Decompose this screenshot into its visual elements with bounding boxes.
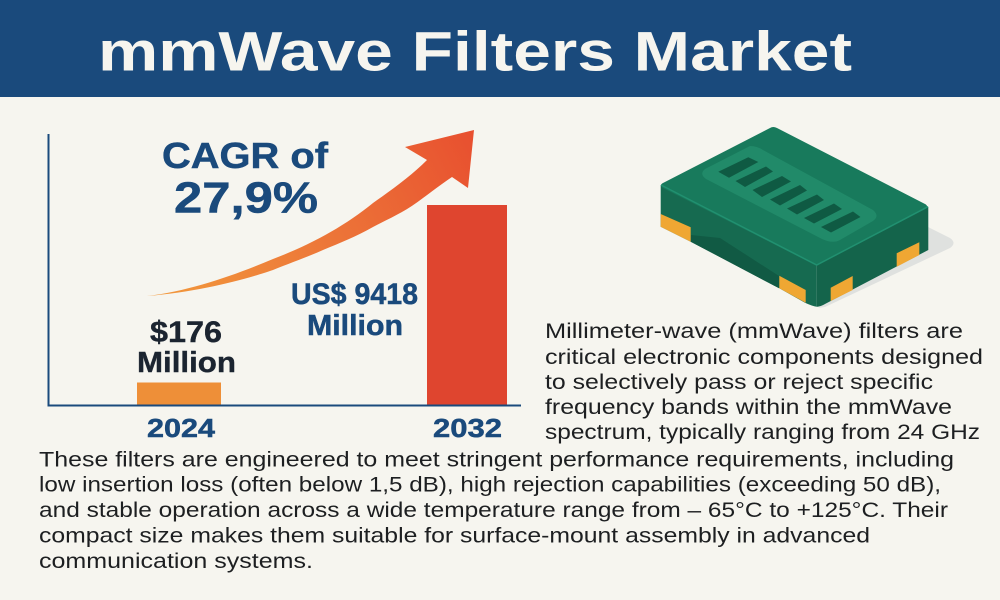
chart axes — [48, 134, 521, 406]
axis label: 2024: 2024 — [147, 413, 216, 443]
text block: definition: Millimeter-wave (mmWave) filters are — [545, 319, 963, 343]
value label: 2024: $176 — [150, 316, 222, 349]
bar: 2032 — [427, 205, 507, 404]
header banner — [0, 0, 1000, 97]
value label: 2032: US$ 9418 — [291, 278, 418, 311]
chip left side undercut — [691, 235, 779, 288]
CAGR label — [162, 135, 329, 222]
title: mmWave Filters Market — [98, 20, 852, 82]
CAGR label: 27,9% — [174, 174, 318, 222]
solder pads — [661, 214, 919, 303]
value label: 2024: Million — [137, 347, 236, 379]
text block: performance and applications — [39, 448, 954, 573]
chip right side — [817, 207, 928, 307]
text block: performance and applications: low insertion loss (often below 1,5 dB), high rejection capabilities (exceeding 50 dB), — [39, 472, 941, 496]
text block: definition: frequency bands within the mmWave — [545, 395, 952, 419]
value label: 2032 — [291, 278, 418, 342]
text block: performance and applications: compact size makes them suitable for surface-mount assembly in advanced — [39, 524, 870, 548]
growth arrow — [147, 130, 474, 296]
bar: 2024 — [137, 382, 221, 404]
CAGR label: CAGR of — [162, 135, 329, 176]
recessed label panel — [702, 146, 876, 242]
axis label: 2032: 2032 — [433, 413, 502, 443]
text block: performance and applications: These filters are engineered to meet stringent performance requirements, including — [39, 448, 954, 472]
value label: 2024 — [137, 316, 236, 379]
text block: definition: spectrum, typically ranging from 24 GHz — [545, 420, 980, 444]
chip left side — [661, 185, 817, 307]
text block: definition: critical electronic components designed — [545, 345, 983, 369]
text block: performance and applications: communication systems. — [39, 549, 313, 573]
icon: mmWave filter chip — [661, 127, 954, 308]
text block: definition: to selectively pass or reject specific — [545, 370, 933, 394]
value label: 2032: Million — [307, 310, 403, 342]
chip slots — [718, 157, 860, 232]
chart: market growth 2024 to 2032 — [48, 130, 521, 443]
text block: performance and applications: and stable operation across a wide temperature range from – 65°C to +125°C. Their — [39, 498, 948, 522]
chip front highlight edge — [661, 185, 928, 265]
text block: definition — [545, 319, 983, 444]
chip top face — [661, 127, 927, 265]
chip shadow — [818, 227, 954, 308]
